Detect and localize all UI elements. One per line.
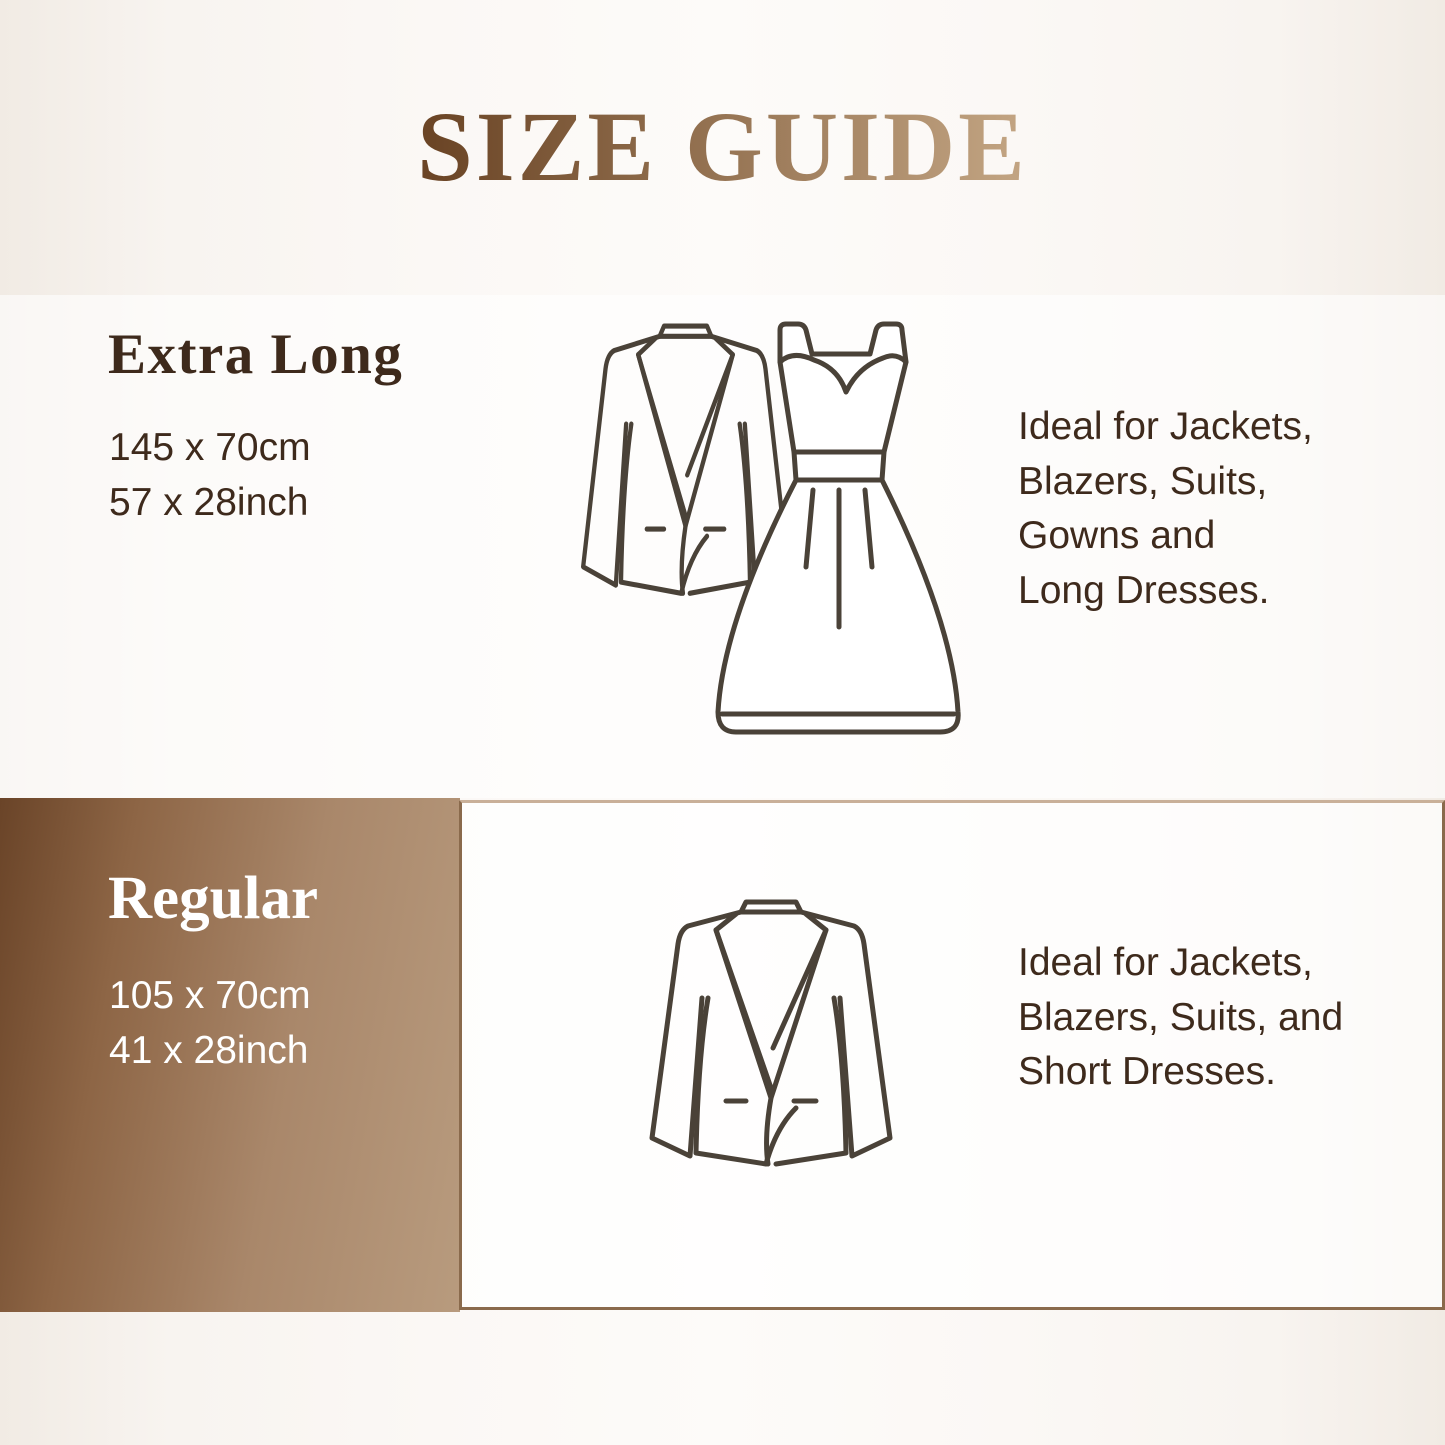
dimensions: Regular: 105 x 70cm [109, 974, 311, 1017]
text: Extra Long description: Ideal for Jackets, [1018, 405, 1313, 448]
text: Extra Long description: Blazers, Suits, [1018, 460, 1267, 502]
text: Extra Long description [1018, 405, 1313, 612]
brown label panel [0, 798, 460, 1312]
dimensions: Regular: 41 x 28inch [109, 1029, 308, 1072]
dimensions: Regular [109, 974, 311, 1072]
text: Regular description [1018, 941, 1343, 1093]
icon: jacket and dress [581, 322, 961, 734]
text: Regular description: Short Dresses. [1018, 1050, 1276, 1093]
heading: Extra Long: Extra Long [108, 323, 403, 386]
text: Regular description: Ideal for Jackets, [1018, 941, 1313, 984]
text: Regular description: Blazers, Suits, and [1018, 996, 1343, 1038]
title: SIZE GUIDE [417, 91, 1028, 202]
title [0, 92, 1445, 202]
text: Extra Long description: Long Dresses. [1018, 568, 1269, 612]
dimensions: Extra Long: 57 x 28inch [109, 481, 308, 524]
dimensions: Extra Long: 145 x 70cm [109, 426, 311, 469]
dimensions: Extra Long [109, 426, 311, 524]
heading: Regular: Regular [108, 865, 318, 932]
panel: Regular [0, 798, 1445, 1312]
icon: jacket [650, 900, 892, 1166]
text: Extra Long description: Gowns and [1018, 514, 1215, 557]
